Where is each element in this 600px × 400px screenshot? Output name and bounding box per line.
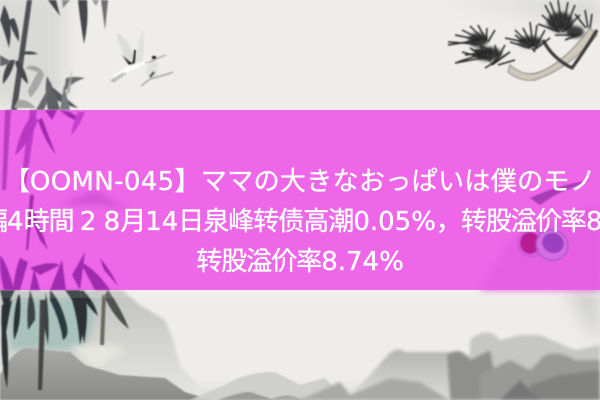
- mountains lower right: [300, 332, 600, 400]
- icon: red seal pots: [518, 225, 573, 265]
- pink band: [0, 110, 600, 290]
- cranes: [111, 30, 173, 86]
- pine branch: [448, 0, 597, 80]
- title line 1: 【OOMN-045】ママの大きなおっぱいは僕のモノ: [4, 167, 596, 197]
- bamboo top left: [0, 0, 108, 110]
- title line 3: 转股溢价率8.74%: [196, 247, 404, 277]
- ink and seal visible through band: [0, 110, 600, 290]
- bamboo and mountain lower left: [0, 290, 345, 400]
